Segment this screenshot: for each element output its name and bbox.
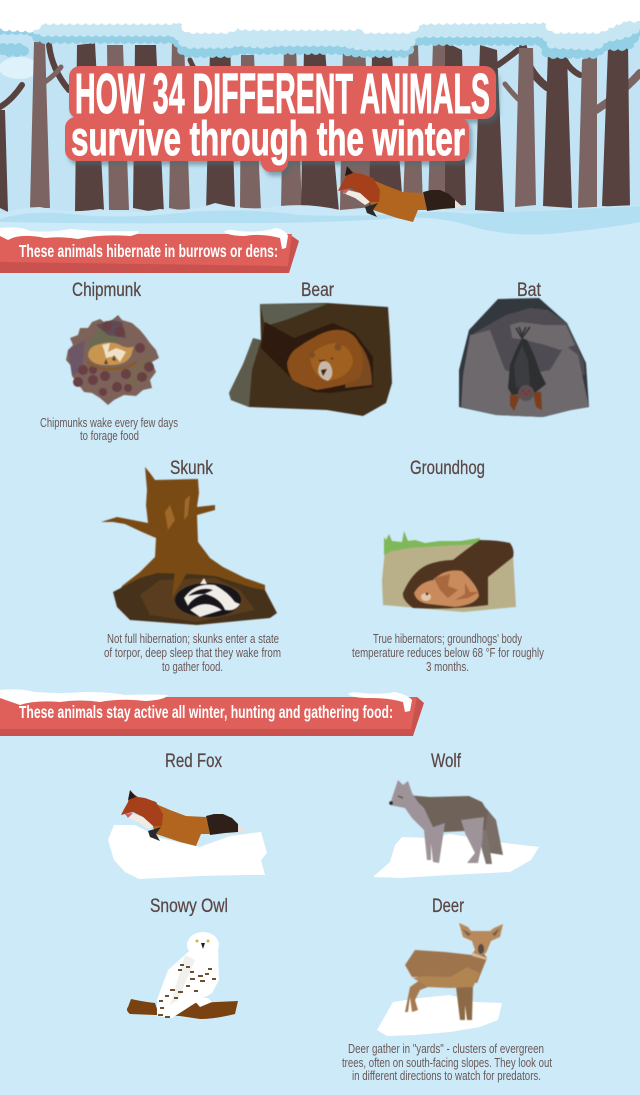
tree trunks (30, 40, 597, 212)
banner: active (0, 689, 424, 736)
caption: chipmunk: to forage food (80, 428, 139, 443)
heading: Snowy Owl: Snowy Owl (150, 895, 228, 917)
panel: bat (459, 279, 589, 417)
panel: bear (229, 279, 392, 416)
panel: deer (342, 895, 552, 1083)
caption: deer (342, 1041, 552, 1083)
caption: groundhog (352, 631, 544, 674)
panel: snowy owl (127, 895, 238, 1019)
heading: Chipmunk: Chipmunk (72, 279, 141, 301)
caption: chipmunk (40, 415, 178, 443)
caption: deer: Deer gather in "yards" - clusters of evergreen (348, 1041, 544, 1056)
small snow cloud (0, 57, 39, 79)
banner: hibernate (0, 227, 299, 273)
illustration: bear den (229, 303, 392, 416)
caption: deer: trees, often on south-facing slopes. They look out (342, 1055, 552, 1070)
illustration: bat cave (459, 298, 589, 417)
panel: red fox (108, 750, 267, 879)
title (65, 62, 496, 172)
banner heading: These animals stay active all winter, hunting and gathering food: (19, 702, 393, 722)
illustration: snow patch (377, 995, 502, 1036)
caption: groundhog: 3 months. (426, 659, 469, 674)
illustration: snow patch (373, 834, 539, 878)
heading: Skunk: Skunk (170, 457, 213, 479)
banner snow (0, 689, 168, 705)
banner snow (0, 227, 138, 240)
banner fold (0, 697, 424, 736)
sleeping chipmunk (87, 342, 136, 369)
panel: wolf (373, 750, 539, 878)
banner face (0, 697, 417, 729)
snow on branches: blue layer (0, 0, 640, 54)
caption: skunk: of torpor, deep sleep that they wake from (104, 645, 281, 660)
banner heading: These animals hibernate in burrows or dens: (19, 241, 278, 261)
panel: groundhog (352, 457, 544, 674)
hanging bat (508, 327, 546, 411)
snow on branches: white layer (0, 0, 640, 29)
heading: Bear: Bear (301, 279, 334, 301)
caption: skunk: to gather food. (162, 659, 223, 674)
caption: groundhog: True hibernators; groundhogs' body (373, 631, 522, 646)
illustration: leaf nest (66, 315, 159, 405)
title backing (65, 66, 496, 172)
caption: skunk (104, 631, 281, 674)
caption: deer: in different directions to watch for predators. (352, 1068, 541, 1083)
panel: skunk (101, 457, 281, 674)
sleeping skunk (175, 578, 241, 617)
tree branches (0, 45, 640, 110)
illustration: snow mound (108, 825, 267, 879)
sky (0, 0, 640, 225)
illustration: red fox (121, 790, 247, 846)
fox in the snow (338, 166, 464, 222)
caption: chipmunk: Chipmunks wake every few days (40, 415, 178, 430)
sleeping groundhog (414, 570, 479, 607)
illustration: groundhog burrow (382, 531, 516, 612)
heading: Groundhog: Groundhog (410, 457, 485, 479)
sleeping bear (287, 330, 372, 390)
heading: Wolf: Wolf (431, 750, 461, 772)
forest scene (0, 0, 640, 280)
caption: skunk: Not full hibernation; skunks enter a state (107, 631, 279, 646)
snowy ground (0, 203, 640, 260)
illustration: tree stump den (101, 467, 277, 625)
illustration: wolf (389, 780, 503, 864)
banner fold (0, 236, 299, 273)
illustration: deer (405, 923, 503, 1020)
heading: Bat: Bat (517, 279, 541, 301)
heading: Red Fox: Red Fox (165, 750, 222, 772)
illustration: log (127, 999, 238, 1019)
banner face (0, 234, 292, 266)
panel: chipmunk (40, 279, 178, 443)
heading: Deer: Deer (432, 895, 464, 917)
illustration: snowy owl (157, 932, 219, 1018)
snow on branches: pale layer (0, 0, 640, 46)
caption: groundhog: temperature reduces below 68 °F for roughly (352, 645, 544, 660)
